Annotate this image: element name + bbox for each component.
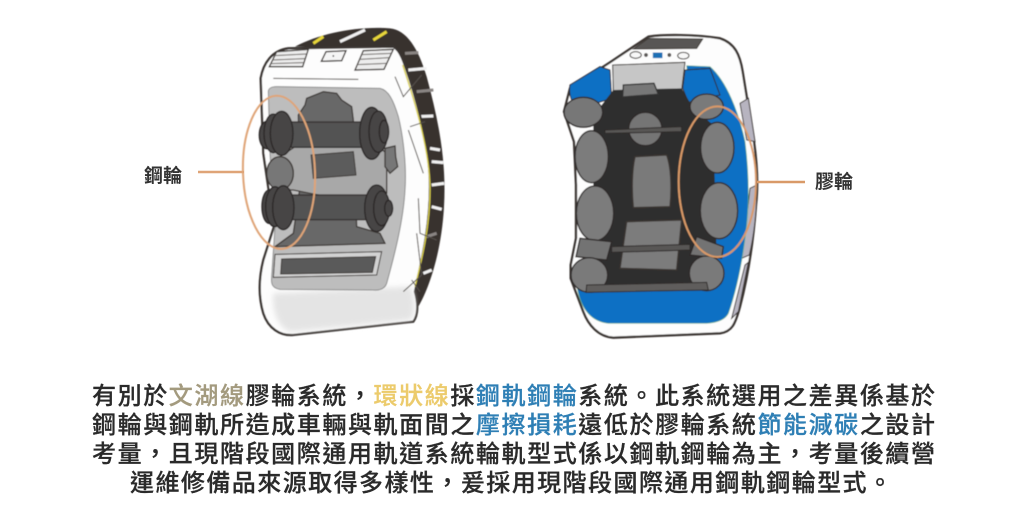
illustration: steel wheel train underside xyxy=(240,28,444,335)
side door hand rails xyxy=(395,75,437,292)
rear cross bar xyxy=(612,244,690,252)
solar roof panel xyxy=(633,38,703,49)
right guide wheel top xyxy=(690,94,723,119)
right tyre 2 xyxy=(700,183,738,239)
dark undercarriage xyxy=(593,88,717,285)
paragraph line 1: 有別於文湖線膠輪系統，環狀線採鋼軌鋼輪系統。此系統選用之差異係基於 xyxy=(92,383,935,410)
central motor block xyxy=(632,155,671,208)
upper right wheel xyxy=(360,107,389,159)
lower right wheel xyxy=(365,185,393,232)
left guide wheel top xyxy=(564,97,603,127)
left rear guide wheel xyxy=(571,258,608,292)
orange highlight ellipse xyxy=(679,106,756,257)
rear bumper bar xyxy=(586,282,708,292)
left tyre 2 xyxy=(576,186,614,241)
bogie side nub xyxy=(385,146,398,173)
central bogie block xyxy=(275,92,385,247)
right bracket xyxy=(690,237,723,258)
bogie centre box xyxy=(311,152,356,178)
front cross bar xyxy=(605,127,682,133)
left bracket xyxy=(576,238,612,260)
front bumper block xyxy=(623,83,658,97)
rear side band xyxy=(295,28,444,307)
left callout leader line xyxy=(198,171,244,173)
rear motor block xyxy=(620,220,682,270)
grey shading of lower body xyxy=(273,287,414,332)
right callout label: rubber wheel: 膠輪 xyxy=(815,170,853,193)
lower left wheel xyxy=(262,186,294,230)
right tyre 1 xyxy=(701,122,734,173)
upper left wheel xyxy=(259,111,293,155)
lower axle xyxy=(287,195,370,220)
right rear guide wheel xyxy=(689,256,724,291)
right callout leader line xyxy=(757,181,805,183)
left tyre 1 xyxy=(575,131,608,183)
front blue seat left xyxy=(570,67,612,108)
orange highlight ellipse xyxy=(240,94,318,250)
left callout label: steel wheel: 鋼輪 xyxy=(144,164,182,187)
car body xyxy=(260,47,430,335)
left journal xyxy=(267,157,293,190)
yellow side line xyxy=(403,65,430,287)
car body xyxy=(564,35,757,338)
blue floor and side xyxy=(577,66,748,323)
paragraph line 3: 考量，且現階段國際通用軌道系統輪軌型式係以鋼軌鋼輪為主，考量後續營 xyxy=(92,441,935,468)
underbody grey panel xyxy=(268,87,405,290)
upper axle xyxy=(283,122,363,147)
paragraph line 4: 運維修備品來源取得多樣性，爰採用現階段國際通用鋼軌鋼輪型式。 xyxy=(130,470,892,497)
side grey panels xyxy=(732,98,757,318)
central disc xyxy=(629,112,662,146)
front roof vents xyxy=(269,49,393,79)
rear recessed tray xyxy=(273,252,382,277)
roof indicators xyxy=(630,52,689,59)
bogie frame xyxy=(273,145,387,207)
body paragraph xyxy=(92,383,935,497)
paragraph line 2: 鋼輪與鋼軌所造成車輛與軌面間之摩擦損耗遠低於膠輪系統節能減碳之設計 xyxy=(92,412,935,439)
side stripes xyxy=(313,30,444,273)
front grey console xyxy=(613,62,685,92)
front blue seat right xyxy=(683,68,720,102)
illustration: rubber tyre train underside xyxy=(564,35,757,338)
